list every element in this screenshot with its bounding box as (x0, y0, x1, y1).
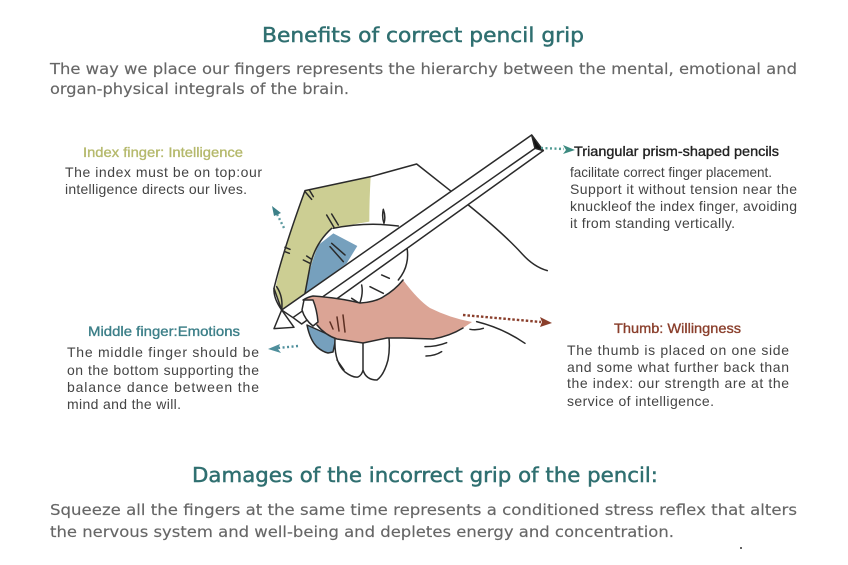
text: thumb: The thumb is placed on one side (567, 342, 789, 358)
text: triangular pencils: knuckleof the index finger, avoiding (570, 198, 797, 214)
text: index finger (65, 164, 262, 197)
arrow: pencil (541, 145, 575, 154)
heading: triangular pencils: Triangular prism-shaped pencils (574, 143, 779, 159)
text: damages: Squeeze all the fingers at the same time represents a conditioned stress reflex that alters (50, 501, 797, 519)
panel: middle finger (67, 323, 259, 412)
thumb nail (302, 300, 318, 326)
text: index finger: The index must be on top:our (65, 164, 262, 180)
hand and pencil illustration (274, 135, 547, 380)
text: thumb: the index: our strength are at the (567, 375, 789, 391)
dot (740, 547, 742, 549)
heading: damages: Damages of the incorrect grip of the pencil: (192, 463, 658, 487)
text: triangular pencils: facilitate correct finger placement. (570, 164, 772, 180)
knuckle creases (285, 190, 483, 356)
intro text: The way we place our fingers represents the hierarchy between the mental, emotional and (49, 60, 797, 78)
text: damages (50, 501, 797, 541)
text: triangular pencils: it from standing vertically. (570, 215, 735, 231)
title: Benefits of correct pencil grip (262, 23, 584, 47)
middle finger fill (305, 233, 357, 294)
text: middle finger: mind and the will. (67, 396, 181, 412)
heading: thumb: Thumb: Willingness (614, 320, 741, 336)
text: triangular pencils: Support it without tension near the (570, 181, 797, 197)
intro text (49, 60, 797, 98)
palm creases (352, 275, 389, 303)
thumb (302, 280, 472, 343)
text: damages: the nervous system and well-being and depletes energy and concentration. (50, 523, 674, 541)
lower fingers (335, 338, 389, 380)
panel: index finger (65, 144, 262, 197)
intro text: organ-physical integrals of the brain. (50, 80, 349, 98)
index finger fill (275, 177, 371, 310)
panel: triangular pencils (570, 143, 797, 231)
text: middle finger: balance dance between the (67, 379, 259, 395)
pencil (274, 135, 543, 329)
text: index finger: intelligence directs our lives. (65, 181, 247, 197)
text: thumb: service of intelligence. (567, 393, 714, 409)
panel: thumb (567, 320, 789, 409)
hand outline (274, 164, 547, 310)
text: middle finger (67, 344, 259, 412)
arrow: middle finger (268, 344, 298, 353)
text: thumb: and some what further back than (567, 359, 789, 375)
thumb creases (330, 315, 345, 332)
lower middle finger (307, 325, 336, 353)
heading: middle finger: Middle finger:Emotions (88, 323, 240, 339)
arrow: index finger (272, 206, 284, 228)
text: triangular pencils (570, 164, 797, 231)
heading: index finger: Index finger: Intelligence (83, 144, 243, 160)
text: middle finger: The middle finger should be (67, 344, 259, 360)
arrow: thumb (463, 315, 552, 327)
text: thumb (567, 342, 789, 409)
text: middle finger: on the bottom supporting the (67, 362, 259, 378)
